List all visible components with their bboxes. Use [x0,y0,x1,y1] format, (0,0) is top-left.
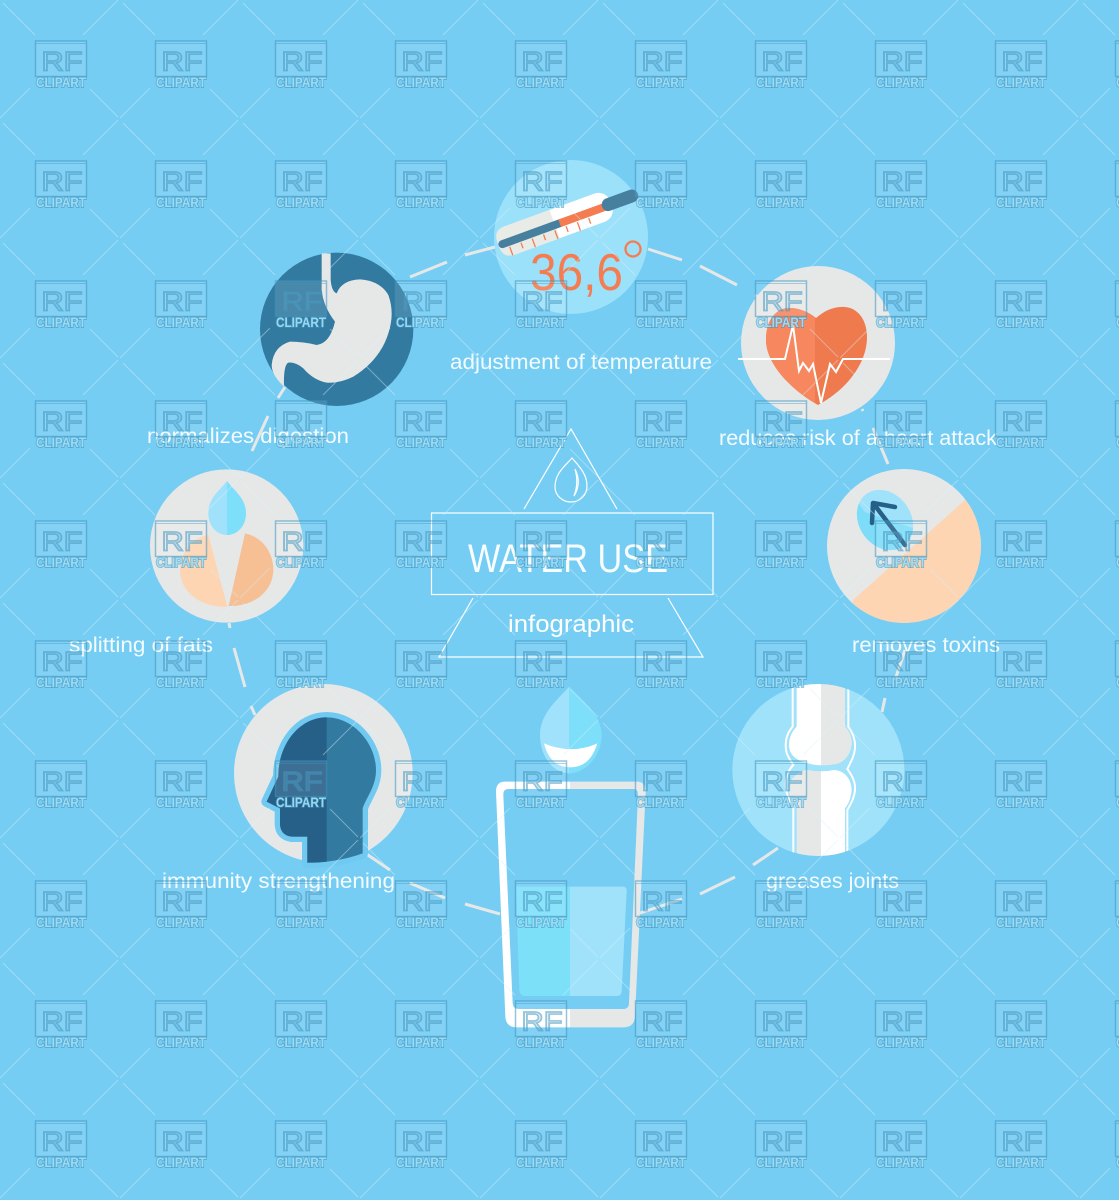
icon: ecg trace [738,325,890,403]
glass outline [496,782,646,1027]
icon: thermometer circle [493,160,648,314]
lower bone [789,770,852,862]
icon: heart circle [738,266,895,420]
label: temperature: adjustment of temperature [450,351,712,374]
icon: toxins circle [827,469,981,623]
icon: head silhouette [267,717,376,863]
blue cell [845,479,925,561]
dashed connecting ring [229,247,905,914]
peach segment [853,500,981,623]
label: heart attack: reduces risk of a heart attack [719,427,998,450]
label: digestion: normalizes digestion [147,425,349,448]
bottom triangle [439,598,703,657]
title frame [432,513,713,594]
fat piece right [229,533,273,606]
label: joints: greases joints [766,870,899,893]
label: fats: splitting of fats [69,634,213,657]
icon: heart [766,307,867,405]
label: toxins: removes toxins [852,634,1000,657]
head outline [267,717,376,863]
subtitle: infographic [508,611,634,638]
icon: stomach circle [260,253,413,406]
icon: fats circle [150,469,303,623]
icon: outline drop [555,458,587,502]
icon: arrow [872,503,905,545]
icon: head circle [234,684,413,863]
icon: stomach [272,253,392,387]
icon: water drop [540,687,602,773]
temperature reading: 36,6 [530,244,623,302]
degree sign [626,242,640,256]
water [516,887,627,996]
joint outlines [786,682,855,858]
icon: glass with water drop [496,687,646,1027]
upper bone [789,675,852,765]
fat piece left [180,535,227,607]
icon: joint circle [732,675,904,862]
label: immunity: immunity strengthening [162,870,395,893]
icon: thermometer [493,182,637,259]
top triangle [524,429,617,509]
title: WATER USE [468,537,668,581]
icon: small drop [208,481,246,535]
title block [432,429,713,657]
